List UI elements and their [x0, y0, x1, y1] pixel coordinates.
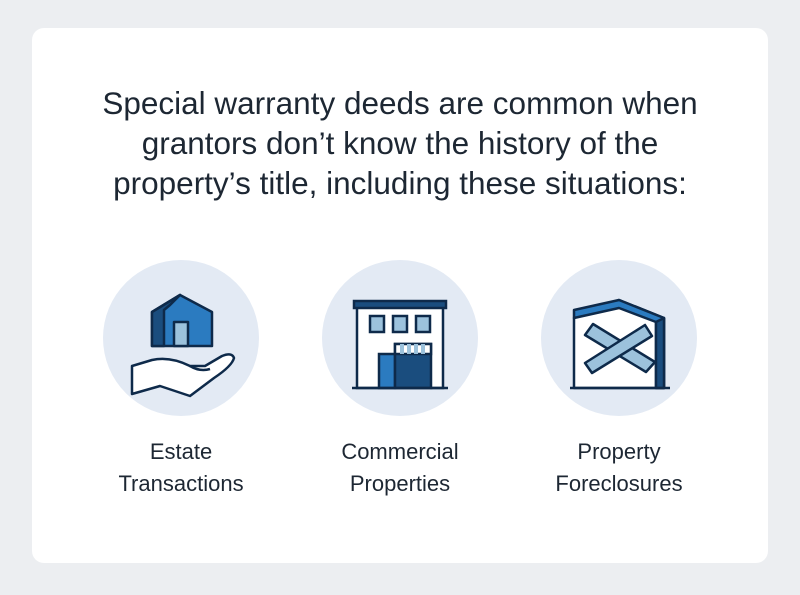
- label: property foreclosures: Property: [577, 439, 661, 464]
- label: property foreclosures: [555, 439, 683, 496]
- title: property’s title, including these situations:: [113, 165, 687, 201]
- title: grantors don’t know the history of the: [142, 125, 658, 161]
- icon: commercial building: [322, 260, 478, 416]
- label: property foreclosures: Foreclosures: [555, 471, 683, 496]
- label: estate transactions: [118, 439, 244, 496]
- title: [102, 85, 698, 201]
- title: Special warranty deeds are common when: [102, 85, 698, 121]
- icon: boarded house: [541, 260, 697, 416]
- label: commercial properties: [341, 439, 459, 496]
- icon: house in hand: [103, 260, 259, 416]
- label: estate transactions: Estate: [150, 439, 212, 464]
- label: estate transactions: Transactions: [118, 471, 244, 496]
- label: commercial properties: Commercial: [341, 439, 459, 464]
- label: commercial properties: Properties: [350, 471, 450, 496]
